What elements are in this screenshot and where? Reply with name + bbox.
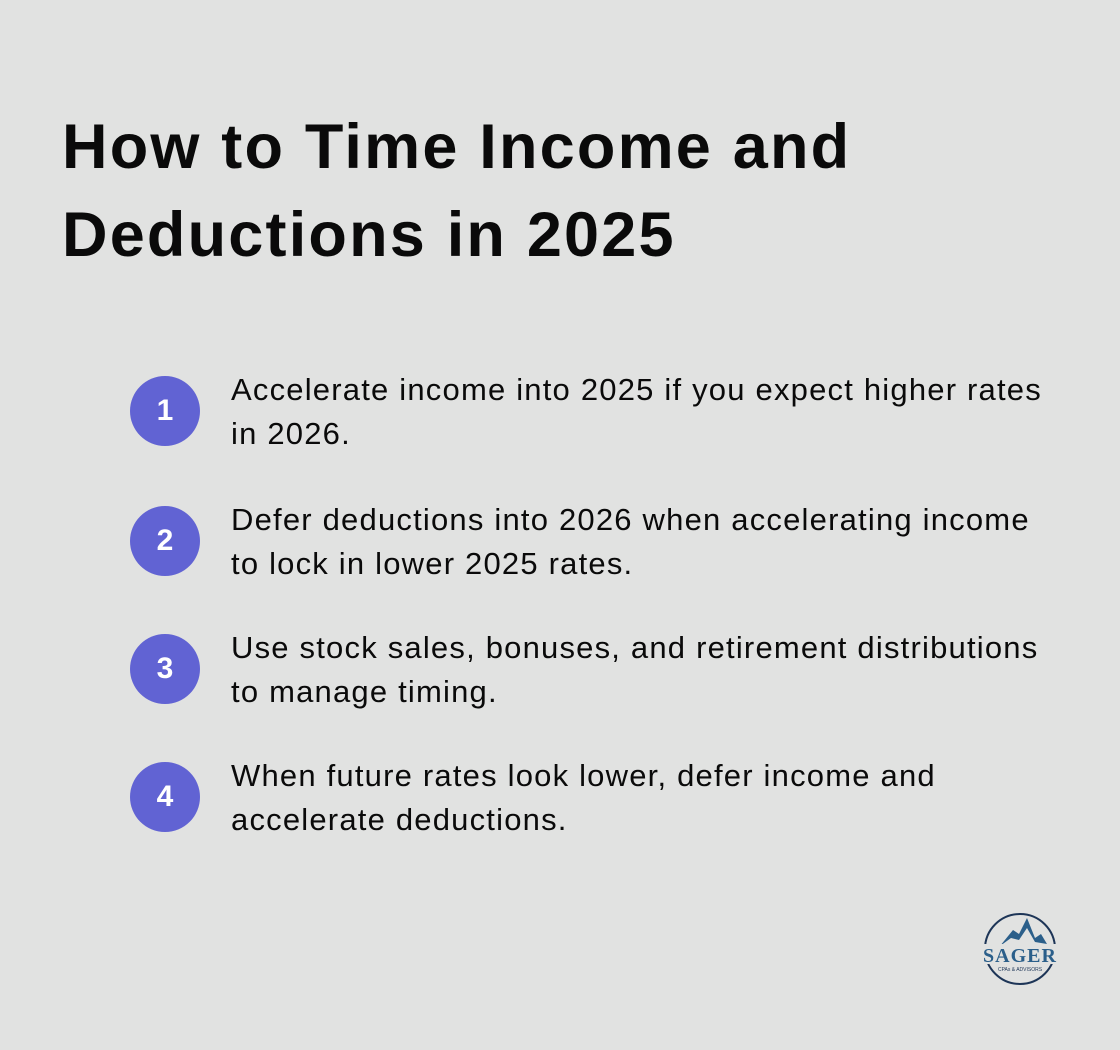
- item 1: 1: [157, 394, 173, 427]
- item 1: in 2026.: [231, 416, 351, 451]
- item 3: Use stock sales, bonuses, and retirement distributions: [231, 630, 1038, 665]
- item 4: [130, 758, 936, 837]
- item 2: [130, 502, 1030, 581]
- title: Deductions in 2025: [62, 200, 676, 270]
- title: [62, 112, 851, 270]
- item 3: to manage timing.: [231, 674, 498, 709]
- item 2: to lock in lower 2025 rates.: [231, 546, 633, 581]
- logo: [983, 913, 1057, 985]
- item 3: [130, 630, 1038, 709]
- item 2: 2: [157, 524, 173, 557]
- title: How to Time Income and: [62, 112, 851, 182]
- logo: SAGER: [983, 945, 1057, 967]
- logo: CPAs & ADVISORS: [998, 967, 1043, 973]
- item 1: [130, 372, 1042, 451]
- item 3: 3: [157, 652, 173, 685]
- item 4: When future rates look lower, defer income and: [231, 758, 936, 793]
- item 4: 4: [157, 780, 173, 813]
- item 2: Defer deductions into 2026 when accelerating income: [231, 502, 1030, 537]
- item 1: Accelerate income into 2025 if you expect higher rates: [231, 372, 1042, 407]
- item 4: accelerate deductions.: [231, 802, 568, 837]
